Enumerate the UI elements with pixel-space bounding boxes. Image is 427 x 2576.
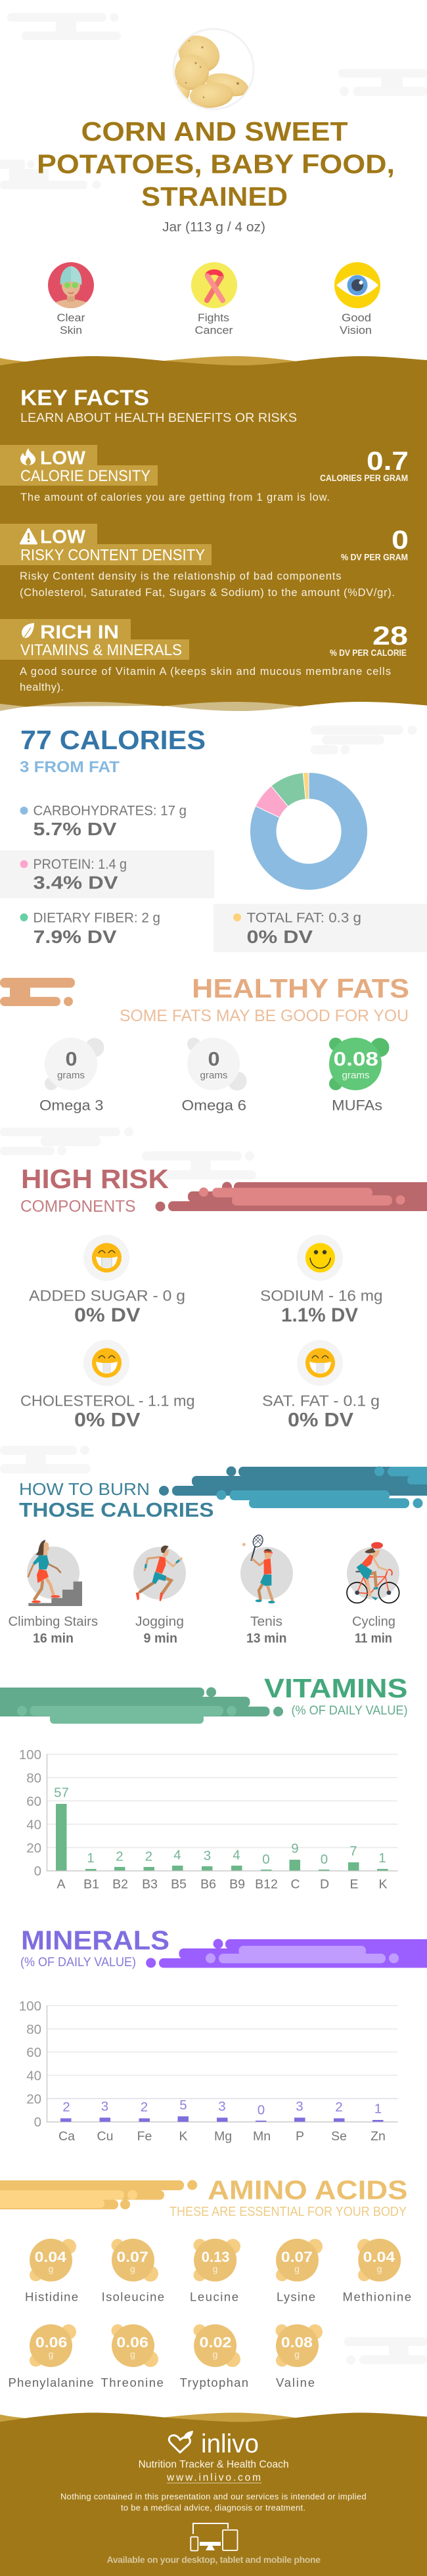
fact: rich in vitamins and minerals: 28 bbox=[372, 622, 408, 651]
bar chart: minerals: 60 bbox=[26, 2045, 41, 2060]
nutrient: protein: PROTEIN: 1.4 g bbox=[33, 857, 127, 872]
title: POTATOES, BABY FOOD, bbox=[37, 149, 395, 179]
panel: how to burn those calories bbox=[8, 1467, 427, 1645]
background cloud: amino acids bbox=[344, 2337, 427, 2364]
bar chart: minerals: 2 bbox=[62, 2100, 70, 2115]
bar chart: minerals: 3 bbox=[101, 2099, 108, 2114]
fact: risky content density bbox=[0, 524, 409, 599]
component: added sugar bbox=[29, 1235, 185, 1326]
amino acid: leucine: Leucine bbox=[190, 2289, 238, 2304]
bar chart: vitamins: K bbox=[378, 1877, 388, 1891]
component: cholesterol: CHOLESTEROL - 1.1 mg bbox=[20, 1392, 194, 1409]
icon: woman with face mask bbox=[48, 262, 94, 308]
fact: risky content density: % DV PER GRAM bbox=[341, 552, 408, 563]
bar chart: minerals: Ca bbox=[58, 2129, 75, 2144]
background cloud: calories bbox=[311, 725, 416, 754]
subheading: (% OF DAILY VALUE) bbox=[292, 1704, 407, 1718]
fact: rich in vitamins and minerals bbox=[0, 619, 408, 693]
amino acid: methionine: Methionine bbox=[343, 2289, 411, 2304]
bar chart: vitamins: 60 bbox=[26, 1794, 41, 1809]
heading: MINERALS bbox=[21, 1925, 169, 1956]
amino acid: tryptophan: 0.02 bbox=[200, 2334, 231, 2351]
panel: amino acids bbox=[0, 2175, 411, 2389]
title: STRAINED bbox=[141, 181, 288, 212]
nutrient: dietary fiber bbox=[20, 911, 160, 947]
activity: jogging: 9 min bbox=[143, 1631, 177, 1645]
nutrient: carbohydrates bbox=[20, 803, 187, 839]
bar chart: minerals: Mg bbox=[214, 2129, 232, 2144]
amino acid: phenylalanine: 0.06 bbox=[35, 2334, 67, 2351]
amino acid: phenylalanine: Phenylalanine bbox=[8, 2376, 93, 2389]
panel: footer bbox=[0, 2413, 427, 2576]
fact: calorie density: CALORIES PER GRAM bbox=[320, 473, 408, 483]
bar chart: minerals: Se bbox=[331, 2129, 347, 2144]
icon: woman climbing stairs bbox=[27, 1540, 82, 1606]
bar chart: minerals: K bbox=[179, 2129, 188, 2144]
bar chart: vitamins: 2 bbox=[116, 1849, 124, 1864]
panel: calories bbox=[0, 725, 427, 952]
label bbox=[340, 311, 372, 336]
disclaimer: Nothing contained in this presentation and our services is intended or implied bbox=[60, 2492, 367, 2501]
bar chart: minerals: P bbox=[296, 2129, 304, 2144]
fact: rich in vitamins and minerals: healthy). bbox=[20, 681, 64, 693]
bar chart: vitamins: D bbox=[320, 1877, 329, 1891]
fact: calorie density: CALORIE DENSITY bbox=[20, 467, 150, 485]
bar chart: vitamins: B5 bbox=[171, 1877, 187, 1891]
bar chart: vitamins: E bbox=[349, 1877, 359, 1891]
component: sodium: SODIUM - 16 mg bbox=[260, 1287, 382, 1304]
tagline: Nutrition Tracker & Health Coach bbox=[139, 2459, 289, 2470]
photo: potatoes in circle bbox=[173, 29, 254, 110]
benefit: fights cancer bbox=[191, 262, 237, 336]
fat: omega 3: Omega 3 bbox=[39, 1097, 104, 1113]
component: sodium bbox=[260, 1235, 382, 1326]
bar chart: minerals: 3 bbox=[218, 2099, 226, 2114]
activity: climbing stairs: Climbing Stairs bbox=[8, 1615, 98, 1629]
bar chart: vitamins bbox=[19, 1747, 398, 1891]
amino acid: methionine: g bbox=[377, 2263, 382, 2274]
bar chart: vitamins: 57 bbox=[54, 1785, 69, 1801]
background cloud: right of high risk bbox=[142, 1151, 256, 1180]
activity: tennis: Tenis bbox=[250, 1615, 282, 1629]
panel: high risk components bbox=[20, 1164, 427, 1431]
background cloud: left of high risk bbox=[0, 1128, 133, 1155]
background cloud: burn section bbox=[0, 1446, 91, 1473]
icon: cyclist bbox=[347, 1542, 399, 1603]
activity: jogging: Jogging bbox=[135, 1615, 184, 1629]
amino acid: threonine bbox=[101, 2324, 164, 2389]
decoration: bars bbox=[155, 1182, 427, 1212]
amino acid: phenylalanine: g bbox=[49, 2349, 53, 2359]
amino acid: leucine bbox=[190, 2239, 240, 2304]
icon: grinning face bbox=[92, 1348, 122, 1377]
bar chart: vitamins: 4 bbox=[173, 1848, 181, 1862]
panel: vitamins bbox=[0, 1673, 407, 1891]
activity: cycling bbox=[347, 1542, 399, 1645]
icon: tennis player bbox=[240, 1534, 293, 1603]
icon: eye bbox=[334, 262, 380, 308]
heading: HOW TO BURN bbox=[19, 1479, 150, 1499]
bar chart: minerals: Zn bbox=[371, 2129, 386, 2144]
bar chart: minerals: 0 bbox=[34, 2115, 41, 2130]
donut chart bbox=[250, 772, 367, 890]
label: Cancer bbox=[194, 324, 233, 336]
icon: grinning face bbox=[92, 1243, 122, 1272]
component: added sugar: 0% DV bbox=[74, 1304, 141, 1326]
nutrient: carbohydrates: CARBOHYDRATES: 17 g bbox=[33, 803, 187, 819]
fat: MUFAs: grams bbox=[342, 1070, 369, 1081]
fact: calorie density: LOW bbox=[40, 448, 86, 469]
bar chart: vitamins: B3 bbox=[142, 1877, 158, 1891]
fact: risky content density: RISKY CONTENT DENSITY bbox=[20, 547, 205, 564]
amino acid: threonine: g bbox=[130, 2349, 135, 2359]
icon: devices bbox=[191, 2523, 238, 2551]
fact: rich in vitamins and minerals: A good source of Vitamin A (keeps skin and mucous membrane cells bbox=[20, 666, 391, 678]
amino acid: threonine: Threonine bbox=[101, 2376, 164, 2389]
bar chart: minerals: 0 bbox=[258, 2103, 265, 2117]
bar chart: minerals: 40 bbox=[26, 2069, 41, 2083]
bar chart: vitamins: B6 bbox=[200, 1877, 216, 1891]
bar chart: vitamins: 1 bbox=[378, 1851, 386, 1866]
bar chart: vitamins: C bbox=[290, 1877, 300, 1891]
amino acid: isoleucine: Isoleucine bbox=[102, 2289, 164, 2304]
benefit: good vision bbox=[334, 262, 380, 336]
nutrient: protein: 3.4% DV bbox=[33, 873, 118, 892]
panel: minerals bbox=[19, 1925, 427, 2144]
amino acid: tryptophan bbox=[180, 2324, 248, 2389]
bar chart: vitamins: 9 bbox=[291, 1841, 299, 1856]
amino acid: valine: Valine bbox=[276, 2376, 315, 2389]
amino acid: valine: 0.08 bbox=[281, 2334, 313, 2351]
amino acid: histidine: g bbox=[49, 2263, 53, 2274]
component: added sugar: ADDED SUGAR - 0 g bbox=[29, 1287, 185, 1304]
bar chart: minerals bbox=[19, 1999, 398, 2144]
icon: flame bbox=[20, 448, 35, 465]
bar chart: vitamins: 0 bbox=[321, 1852, 328, 1867]
activity: climbing stairs: 16 min bbox=[33, 1631, 74, 1645]
component: cholesterol bbox=[20, 1340, 194, 1431]
activity: jogging bbox=[133, 1546, 186, 1645]
logo: inlivo: inlivo bbox=[201, 2429, 259, 2458]
activity: cycling: Cycling bbox=[352, 1615, 395, 1629]
fat: omega 6: 0 bbox=[208, 1049, 219, 1070]
bar chart: vitamins: A bbox=[56, 1877, 66, 1891]
disclaimer bbox=[60, 2492, 367, 2513]
fat: MUFAs: 0.08 bbox=[334, 1049, 378, 1070]
component: saturated fat: SAT. FAT - 0.1 g bbox=[262, 1392, 380, 1409]
logo: inlivo bbox=[169, 2429, 259, 2458]
fat: omega 3: 0 bbox=[66, 1049, 78, 1070]
activity: tennis: 13 min bbox=[246, 1631, 286, 1645]
bar chart: minerals: 100 bbox=[19, 1999, 41, 2013]
fact: risky content density: (Cholesterol, Saturated Fat, Sugars & Sodium) to the amount (%DV/gr). bbox=[20, 587, 395, 599]
label bbox=[194, 311, 233, 336]
bar chart: vitamins: 80 bbox=[26, 1770, 41, 1786]
amino acid: isoleucine bbox=[102, 2239, 164, 2304]
bar chart: minerals: 2 bbox=[141, 2100, 148, 2115]
bar chart: minerals: 1 bbox=[374, 2102, 382, 2116]
decoration: bars bbox=[0, 1688, 283, 1724]
title bbox=[37, 116, 395, 212]
bar chart: vitamins: 2 bbox=[145, 1849, 152, 1864]
amino acid: threonine: 0.06 bbox=[116, 2334, 148, 2351]
fat: omega 3: grams bbox=[57, 1070, 85, 1081]
subheading: COMPONENTS bbox=[20, 1197, 135, 1216]
fat: MUFAs: MUFAs bbox=[332, 1097, 382, 1113]
bar chart: vitamins: 4 bbox=[233, 1848, 240, 1862]
amino acid: leucine: 0.13 bbox=[202, 2249, 230, 2265]
bar chart: vitamins: 1 bbox=[87, 1851, 95, 1866]
heading: 77 CALORIES bbox=[20, 725, 206, 755]
amino acid: lysine: g bbox=[294, 2263, 300, 2274]
icon: man jogging bbox=[133, 1546, 186, 1601]
amino acid: methionine bbox=[343, 2239, 411, 2304]
bar chart: vitamins: 100 bbox=[19, 1747, 41, 1762]
label: Fights bbox=[198, 311, 229, 324]
heading: VITAMINS bbox=[264, 1673, 407, 1703]
amino acid: lysine: Lysine bbox=[277, 2289, 315, 2304]
subheading: LEARN ABOUT HEALTH BENEFITS OR RISKS bbox=[20, 411, 297, 425]
amino acid: methionine: 0.04 bbox=[363, 2249, 395, 2265]
decoration: bars bbox=[0, 978, 75, 1006]
component: saturated fat bbox=[262, 1340, 380, 1431]
nutrient: total fat: 0% DV bbox=[247, 927, 313, 947]
amino acid: leucine: g bbox=[213, 2263, 217, 2274]
website link: www.inlivo.com bbox=[166, 2472, 261, 2483]
fact: risky content density: 0 bbox=[392, 526, 409, 555]
activity: cycling: 11 min bbox=[355, 1631, 392, 1645]
decoration: bars bbox=[146, 1939, 427, 1967]
label: Vision bbox=[340, 324, 372, 336]
label bbox=[56, 311, 85, 336]
background cloud: top left bbox=[7, 13, 121, 40]
fact: rich in vitamins and minerals: RICH IN bbox=[40, 622, 119, 643]
bar chart: vitamins: 40 bbox=[26, 1818, 41, 1832]
bar chart: vitamins: 3 bbox=[204, 1848, 211, 1864]
panel: how to burn those calories: THOSE CALORIES bbox=[19, 1498, 214, 1521]
fact: rich in vitamins and minerals: VITAMINS & MINERALS bbox=[20, 641, 182, 659]
fact: calorie density: 0.7 bbox=[367, 447, 409, 476]
serving size: Jar (113 g / 4 oz) bbox=[162, 219, 265, 235]
decoration: bars bbox=[0, 2180, 197, 2209]
heading: HIGH RISK bbox=[21, 1164, 169, 1194]
bar chart: minerals: Mn bbox=[253, 2129, 271, 2144]
bar chart: vitamins: 0 bbox=[262, 1852, 270, 1867]
bar chart: minerals: 80 bbox=[26, 2022, 41, 2037]
amino acid: valine: g bbox=[294, 2349, 300, 2359]
icon: smiling face bbox=[305, 1243, 335, 1272]
amino acid: tryptophan: Tryptophan bbox=[180, 2376, 248, 2389]
bar chart: vitamins: B12 bbox=[255, 1877, 278, 1891]
background cloud: top right bbox=[338, 69, 427, 96]
fat: MUFAs bbox=[329, 1038, 389, 1113]
label: Clear bbox=[56, 311, 85, 324]
bar chart: minerals: 20 bbox=[26, 2092, 41, 2107]
amino acid: isoleucine: g bbox=[130, 2263, 135, 2274]
heading: AMINO ACIDS bbox=[208, 2175, 407, 2205]
panel: key facts bbox=[0, 356, 427, 711]
amino acid: histidine bbox=[25, 2239, 78, 2304]
fat: omega 3 bbox=[39, 1038, 104, 1113]
bar chart: vitamins: 0 bbox=[34, 1864, 41, 1879]
bar chart: vitamins: 7 bbox=[349, 1844, 357, 1858]
bar chart: minerals: 2 bbox=[335, 2100, 343, 2115]
subheading: SOME FATS MAY BE GOOD FOR YOU bbox=[120, 1007, 409, 1025]
fat: omega 6: Omega 6 bbox=[181, 1097, 246, 1113]
subheading: (% OF DAILY VALUE) bbox=[20, 1956, 136, 1969]
icon: ribbon bbox=[191, 262, 237, 308]
amino acid: lysine bbox=[276, 2239, 323, 2304]
bar chart: vitamins: B1 bbox=[83, 1877, 99, 1891]
title: CORN AND SWEET bbox=[81, 116, 348, 147]
fact: risky content density: LOW bbox=[40, 527, 86, 548]
amino acid: histidine: 0.04 bbox=[35, 2249, 67, 2265]
component: sodium: 1.1% DV bbox=[281, 1304, 358, 1326]
nutrient: total fat bbox=[214, 904, 427, 952]
fact: calorie density: The amount of calories you are getting from 1 gram is low. bbox=[20, 492, 330, 503]
disclaimer: to be a medical advice, diagnosis or treatment. bbox=[121, 2502, 305, 2513]
nutrient: total fat: TOTAL FAT: 0.3 g bbox=[247, 911, 361, 925]
amino acid: phenylalanine bbox=[8, 2324, 93, 2389]
bar chart: vitamins: 20 bbox=[26, 1841, 41, 1856]
decoration: bars bbox=[159, 1467, 427, 1508]
fact: calorie density bbox=[0, 445, 409, 503]
benefit: clear skin bbox=[48, 262, 94, 334]
nutrient: dietary fiber: DIETARY FIBER: 2 g bbox=[33, 911, 160, 925]
fat: omega 6 bbox=[181, 1038, 247, 1113]
amino acid: tryptophan: g bbox=[213, 2349, 217, 2359]
component: saturated fat: 0% DV bbox=[288, 1409, 353, 1431]
icon: leaf bbox=[22, 623, 34, 638]
subheading: THESE ARE ESSENTIAL FOR YOUR BODY bbox=[169, 2205, 407, 2219]
fact: rich in vitamins and minerals: % DV PER CALORIE bbox=[330, 648, 407, 658]
fact: risky content density: Risky Content density is the relationship of bad components bbox=[20, 570, 342, 582]
heading: KEY FACTS bbox=[20, 385, 149, 410]
panel: healthy fats bbox=[0, 973, 409, 1113]
activity: tennis bbox=[240, 1534, 293, 1645]
bar chart: minerals: 3 bbox=[296, 2099, 303, 2114]
bar chart: minerals: Fe bbox=[137, 2129, 152, 2144]
icon: warning triangle bbox=[21, 529, 37, 543]
amino acid: valine bbox=[276, 2324, 323, 2389]
bar chart: vitamins: B9 bbox=[229, 1877, 245, 1891]
component: cholesterol: 0% DV bbox=[74, 1409, 141, 1431]
availability note: Available on your desktop, tablet and mobile phone bbox=[106, 2554, 321, 2565]
bar chart: minerals: Cu bbox=[97, 2129, 113, 2144]
amino acid: isoleucine: 0.07 bbox=[116, 2249, 148, 2265]
amino acid: histidine: Histidine bbox=[25, 2289, 78, 2304]
amino acid: lysine: 0.07 bbox=[281, 2249, 313, 2265]
heading: HEALTHY FATS bbox=[192, 973, 409, 1003]
background cloud: behind title bbox=[0, 160, 101, 189]
activity: climbing stairs bbox=[8, 1540, 98, 1645]
nutrient: protein bbox=[0, 850, 214, 898]
nutrient: dietary fiber: 7.9% DV bbox=[33, 927, 117, 947]
subheading: 3 FROM FAT bbox=[20, 758, 120, 776]
bar chart: minerals: 5 bbox=[179, 2098, 187, 2113]
label: Skin bbox=[60, 324, 82, 336]
label: Good bbox=[342, 311, 371, 324]
bar chart: vitamins: B2 bbox=[112, 1877, 128, 1891]
fat: omega 6: grams bbox=[200, 1070, 227, 1081]
nutrient: carbohydrates: 5.7% DV bbox=[33, 819, 117, 839]
icon: grinning face bbox=[305, 1348, 335, 1377]
